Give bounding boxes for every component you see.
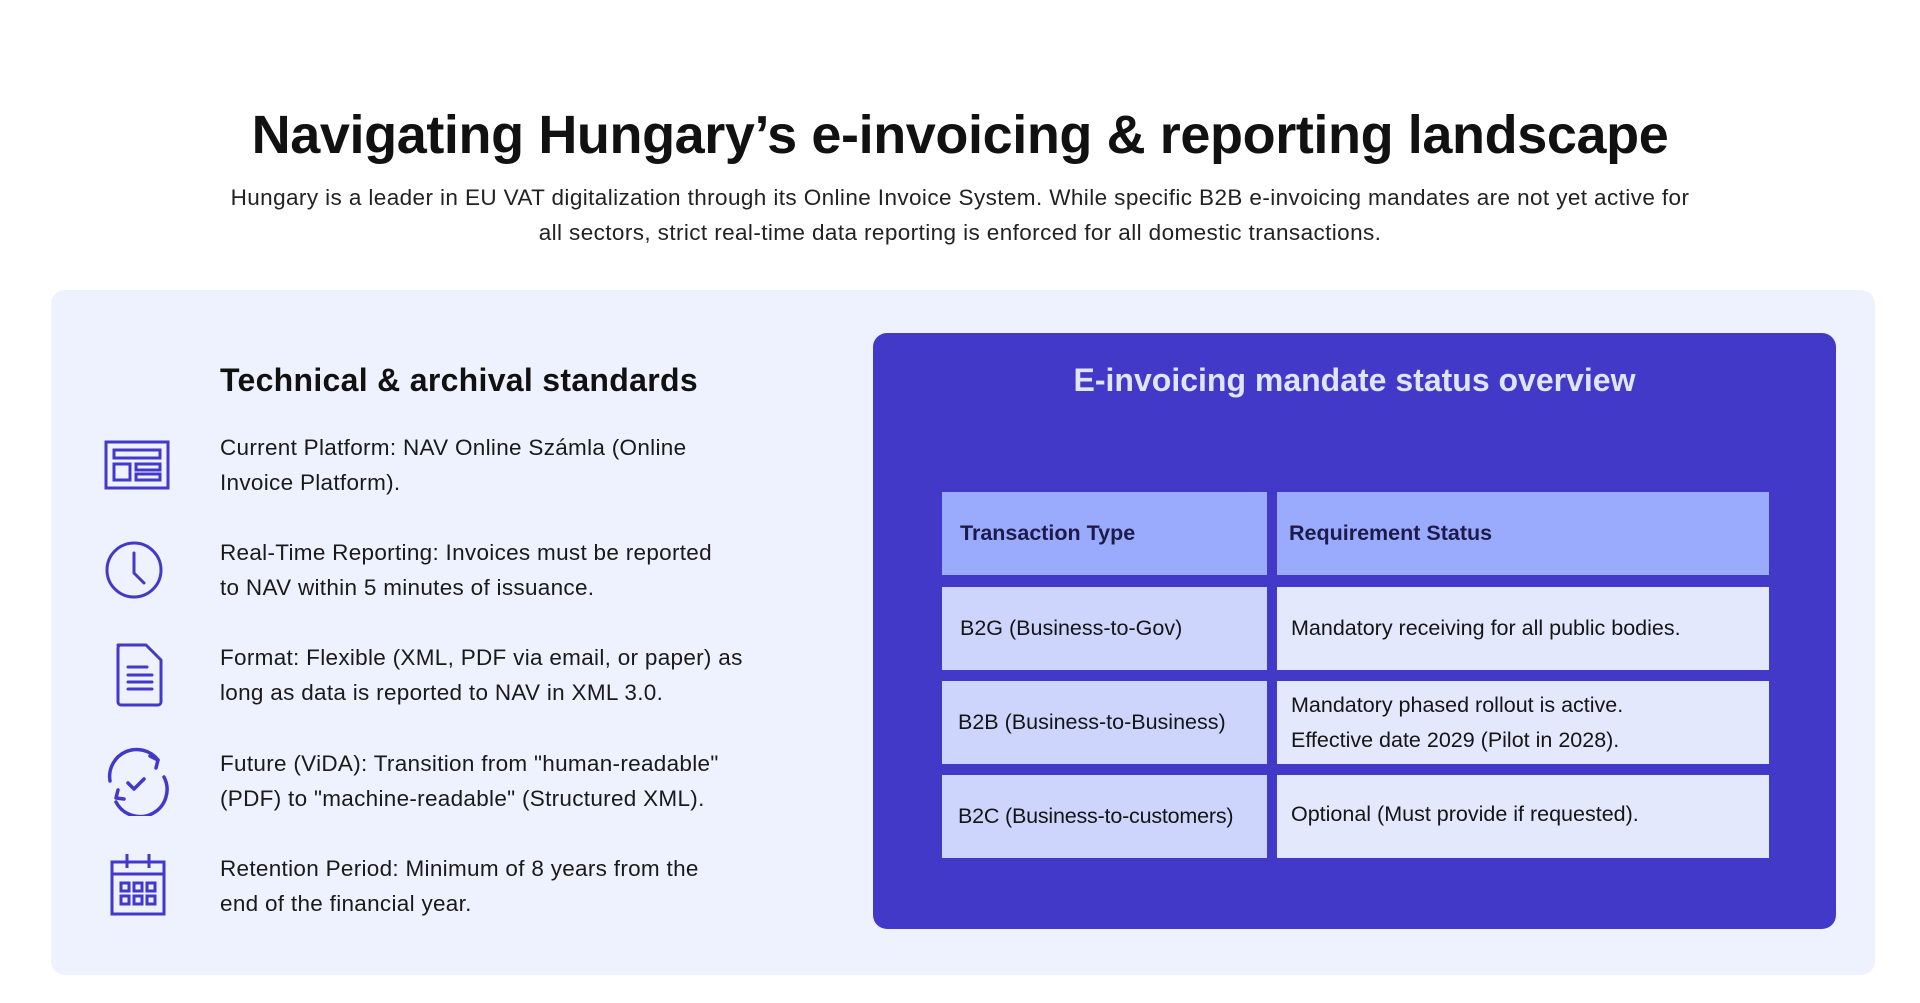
icon: document [116,644,162,706]
panel: background [51,290,1875,975]
text: real-time reporting: Real-Time Reporting: Invoices must be reported [220,540,712,565]
text: current platform [220,435,686,495]
text: real-time reporting [220,540,712,600]
subtitle [231,185,1689,245]
icon: sync check [108,748,169,816]
icon: platform layout [104,440,170,490]
title: Navigating Hungary’s e-invoicing & reporting landscape [252,105,1668,165]
table: mandate status: Requirement Status [1289,521,1492,545]
table: mandate status: B2B (Business-to-Business) [958,710,1226,734]
panel: mandate status [873,333,1836,929]
text: format: long as data is reported to NAV in XML 3.0. [220,680,663,705]
table: mandate status: B2G (Business-to-Gov) [960,616,1182,640]
table: mandate status: Transaction Type [960,521,1135,545]
table: mandate status: B2C (Business-to-customers) [958,804,1233,828]
text: retention period: Retention Period: Minimum of 8 years from the [220,856,699,881]
text: future ViDA: (PDF) to "machine-readable" (Structured XML). [220,786,705,811]
text: retention period: end of the financial year. [220,891,472,916]
text: current platform: Current Platform: NAV Online Számla (Online [220,435,686,460]
heading: mandate status: E-invoicing mandate status overview [1074,362,1635,398]
text: format: Format: Flexible (XML, PDF via email, or paper) as [220,645,743,670]
text: real-time reporting: to NAV within 5 minutes of issuance. [220,575,594,600]
table: mandate status: Mandatory phased rollout is active. [1291,692,1623,716]
table: mandate status: Effective date 2029 (Pilot in 2028). [1291,728,1619,752]
subtitle: all sectors, strict real-time data reporting is enforced for all domestic transactions. [539,220,1381,245]
text: retention period [220,856,699,916]
icon: clock [106,542,162,598]
table: mandate status: Optional (Must provide if requested). [1291,802,1639,826]
text: current platform: Invoice Platform). [220,470,400,495]
icon: calendar [110,854,166,916]
table: mandate status [942,492,1769,858]
text: future ViDA [220,751,719,811]
heading: technical standards: Technical & archival standards [220,362,698,398]
text: format [220,645,743,705]
table: mandate status: Mandatory receiving for all public bodies. [1291,616,1681,640]
subtitle: Hungary is a leader in EU VAT digitalization through its Online Invoice System. While specific B2B e-invoicing mandates are not yet active for [231,185,1689,210]
text: future ViDA: Future (ViDA): Transition from "human-readable" [220,751,719,776]
